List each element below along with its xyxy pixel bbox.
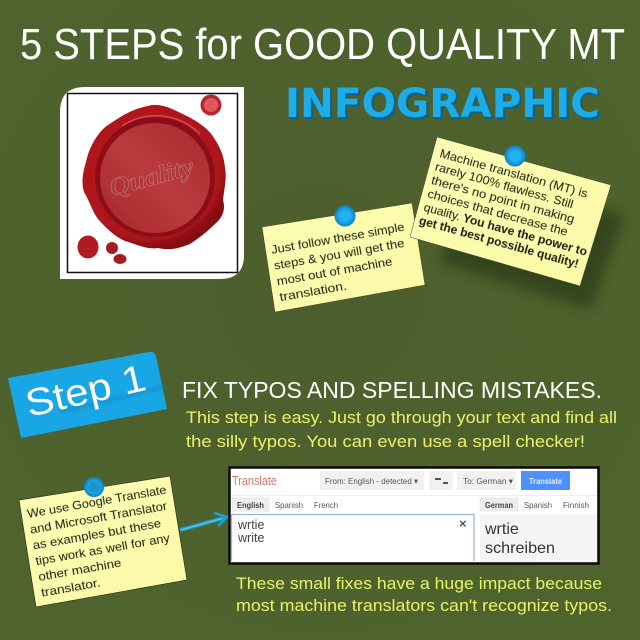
pin: [334, 206, 356, 226]
target output: schreiben: [485, 540, 555, 557]
seal text: Quality: [107, 153, 198, 202]
step heading: FIX TYPOS AND SPELLING MISTAKES.: [182, 377, 602, 403]
step description: [186, 408, 617, 451]
note text: translation.: [278, 279, 348, 304]
target output: wrtie: [484, 521, 519, 538]
note text: get the best possible quality!: [418, 213, 580, 271]
subtitle: infographic: INFOGRAPHIC: [285, 81, 600, 127]
source input: ×: [459, 516, 467, 531]
note text: other machine: [37, 556, 123, 584]
target language tabs: Finnish: [563, 500, 589, 510]
target language tabs: German: [485, 500, 513, 510]
to selector: [457, 471, 516, 490]
translate button: Translate: [529, 476, 562, 486]
target output: [480, 514, 597, 562]
note text: Just follow these simple: [270, 220, 406, 257]
note text: [26, 483, 182, 600]
translate screenshot: [230, 468, 598, 564]
source language tabs: French: [314, 500, 338, 510]
target language tabs: [480, 498, 589, 511]
step description: This step is easy. Just go through your text and find all: [186, 408, 617, 427]
note text: there's no point in making: [430, 173, 576, 226]
note text: tips work as well for any: [34, 531, 171, 568]
note text: We use Google Translate: [26, 483, 168, 521]
note text: rarely 100% flawless. Still: [433, 160, 575, 211]
from selector: [320, 471, 424, 490]
bottom text: most machine translators can't recognize typos.: [236, 596, 612, 615]
note text: as examples but these: [32, 516, 162, 552]
pin: [504, 146, 526, 166]
swap button: [429, 471, 453, 490]
note text: quality. You have the power to: [422, 200, 589, 259]
step description: the silly typos. You can even use a spell checker!: [186, 432, 585, 451]
source language tabs: Spanish: [275, 500, 303, 510]
from selector: From: English - detected ▾: [325, 476, 419, 486]
note text: [418, 146, 604, 272]
icon: wax seal: [83, 105, 226, 249]
pin: [84, 477, 104, 497]
step label: Step 1: [22, 357, 150, 426]
arrow: [180, 513, 227, 530]
note text: [270, 220, 414, 304]
translate label: Translate: [232, 473, 277, 488]
bottom text: These small fixes have a huge impact because: [236, 574, 602, 593]
note text: translator.: [40, 576, 102, 600]
source input: write: [237, 531, 264, 545]
note text: choices that decrease the: [426, 187, 570, 239]
subtitle: infographic: INFOGRAPHIC: [287, 83, 602, 129]
note text: Machine translation (MT) is: [438, 146, 589, 201]
wax drops: [78, 94, 222, 264]
source language tabs: English: [237, 500, 264, 510]
source language tabs: [232, 498, 338, 511]
quality seal image: [60, 87, 244, 279]
source input: [232, 514, 474, 561]
sticky note: translators: [19, 476, 187, 607]
to selector: To: German ▾: [463, 476, 514, 486]
sticky note: machine translation: [410, 137, 625, 310]
note text: most out of machine: [276, 254, 394, 288]
translate button: [521, 471, 570, 490]
step 1 tag: [8, 352, 167, 438]
note text: and Microsoft Translator: [29, 499, 168, 537]
target language tabs: Spanish: [524, 500, 552, 510]
bottom text: [236, 574, 612, 615]
sticky note: follow these steps: [262, 203, 425, 312]
note text: steps & you will get the: [273, 236, 406, 273]
source input: wrtie: [237, 518, 264, 532]
